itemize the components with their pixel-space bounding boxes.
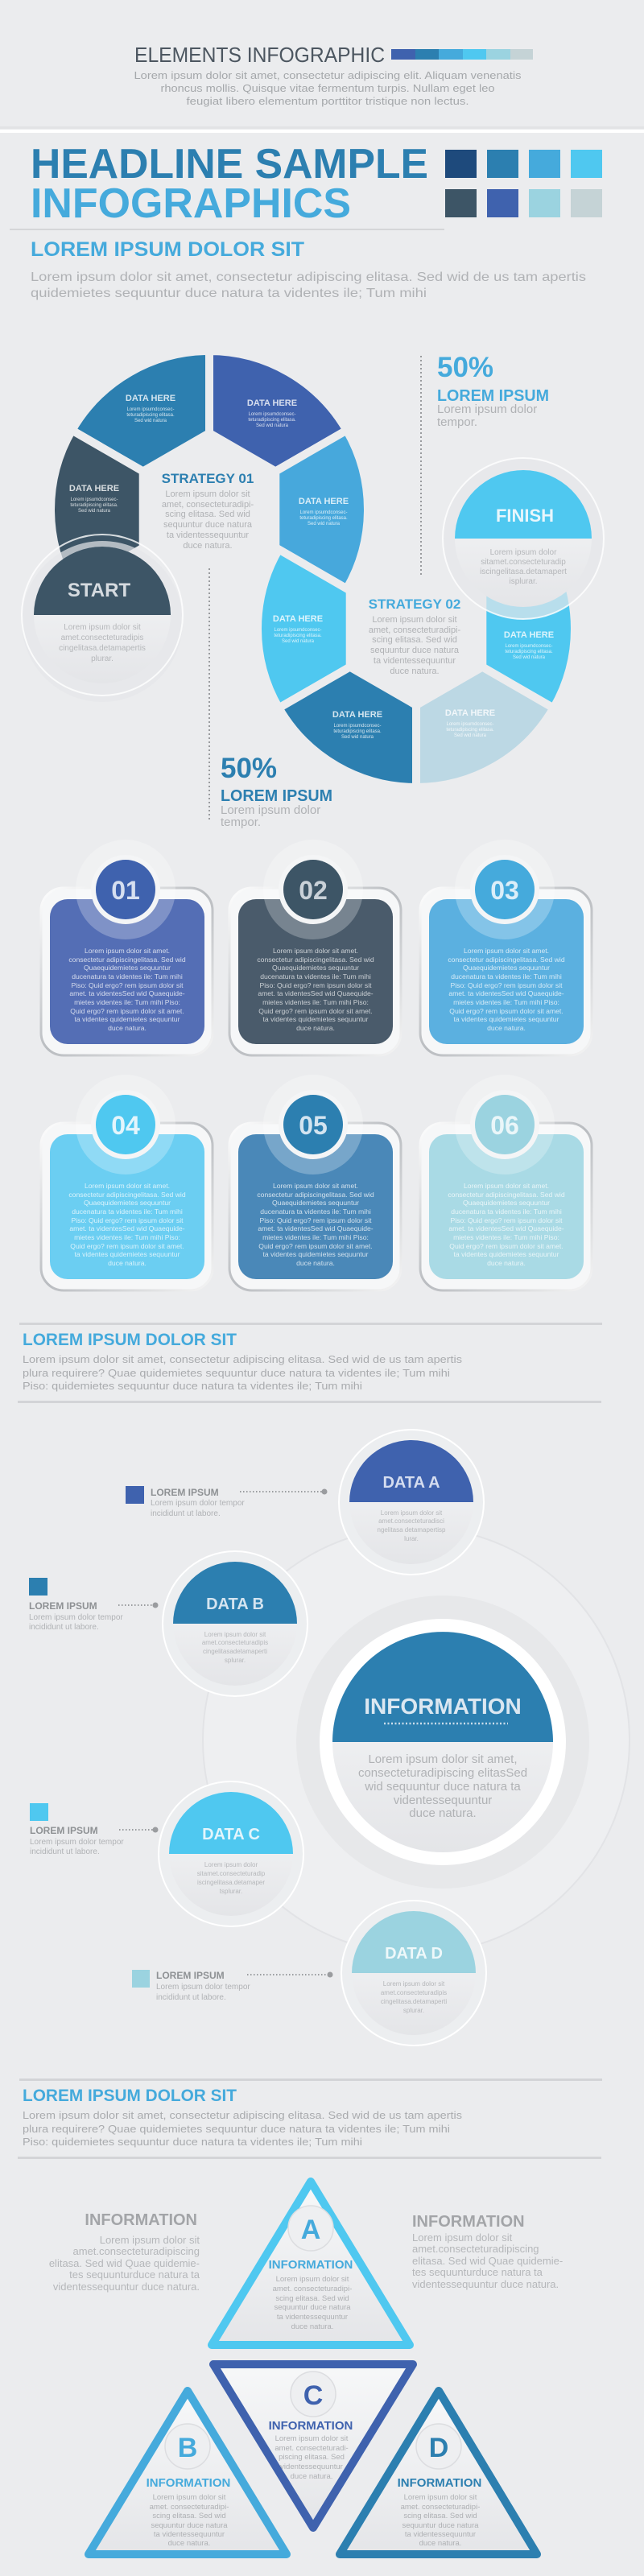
card 05: amet. ta videntesSed wid Quaequide- [258,1224,374,1232]
data labels: Lorem ipsumdconsec- [248,412,296,417]
card 05: mietes videntes ile: Tum mihi Piso: [262,1233,369,1241]
strategy 02 text [369,597,460,676]
left information text: tes sequunturduce natura ta [69,2268,200,2281]
headline: HEADLINE SAMPLE [31,141,428,188]
triangle C: INFORMATION [269,2419,353,2433]
data labels: DATA HERE [69,484,119,493]
strategy 01 text: amet, consecteturadipi- [162,500,254,510]
section 2 heading and text: Piso: quidemietes sequuntur duce natura ta videntes ile; Tum mihi [23,1380,362,1392]
card 05: Quaequidemietes sequuntur [272,1199,359,1207]
card 04: Quaequidemietes sequuntur [84,1199,171,1207]
information main circle: duce natura. [409,1806,477,1820]
triangle C: videntessequuntur [280,2462,343,2471]
card 05 [229,1075,401,1290]
right information text: videntessequuntur duce natura. [412,2278,559,2290]
card 01: Quaequidemietes sequuntur [84,964,171,972]
50% top callout: 50% [437,352,493,383]
triangle C: duce natura. [291,2472,332,2481]
header: elements infographic: feugiat libero elementum porttitor tristique non lectus. [187,95,469,107]
card 05: Piso: Quid ergo? rem ipsum dolor sit [259,1216,372,1224]
card 06: mietes videntes ile: Tum mihi Piso: [453,1233,559,1241]
data labels: DATA HERE [332,710,382,720]
data B circle: amet.consecteturadipis [202,1639,268,1646]
50% bottom callout: tempor. [221,815,261,829]
start circle: cingelitasa.detamapertis [59,644,146,653]
data labels: Lorem ipsumdconsec- [446,722,494,727]
triangle A: ta videntessequuntur [277,2313,348,2322]
data C circle: iscingelitasa.detamaper [197,1879,265,1886]
information main circle [332,1632,553,1852]
strategy 02 text: ta videntessequuntur [374,656,456,666]
strategy 02 ring [258,549,575,787]
card 06: amet. ta videntesSed wid Quaequide- [448,1224,564,1232]
information main circle: consecteturadipiscing elitasSed [358,1766,527,1780]
triangle A: Lorem ipsum dolor sit [276,2275,349,2284]
card 06: Quaequidemietes sequuntur [463,1199,550,1207]
card 01: Piso: Quid ergo? rem ipsum dolor sit [71,981,184,989]
triangle C: Lorem ipsum dolor sit [275,2434,349,2443]
data A circle: amet.consecteturadisci [378,1517,444,1525]
triangles diagram [49,2182,563,2554]
card 05: Lorem ipsum dolor sit amet. [273,1182,358,1190]
data labels: teturadipiscing elitasa. [505,650,553,654]
triangle A [212,2182,410,2345]
finish circle: sitamet.consecteturadip [481,558,566,567]
strategy 01 text: duce natura. [183,541,233,551]
triangle D: scing elitasa. Sed wid [403,2512,477,2520]
strategy 02 text: duce natura. [390,667,440,676]
card 04: 04 [111,1111,140,1140]
triangle B: sequuntur duce natura [151,2521,228,2530]
label D: Lorem ipsum dolor tempor [156,1983,250,1992]
card 01: duce natura. [108,1024,147,1032]
card 02: Piso: Quid ergo? rem ipsum dolor sit [259,981,372,989]
section 3 heading and text: LOREM IPSUM DOLOR SIT [23,2087,237,2105]
strategy 01 text: STRATEGY 01 [162,471,254,486]
card 01: consectetur adipiscingelitasa. Sed wid [68,956,186,964]
card 06 [420,1075,592,1290]
data A circle [339,1430,484,1575]
data labels: DATA HERE [247,398,297,408]
data labels: Lorem ipsumdconsec- [299,510,348,515]
data labels: Sed wid natura [78,509,111,514]
data labels: Sed wid natura [134,419,167,423]
card 02: amet. ta videntesSed wid Quaequide- [258,989,374,997]
card 01: mietes videntes ile: Tum mihi Piso: [74,998,180,1006]
50% top callout: Lorem ipsum dolor [437,402,537,416]
data labels: DATA HERE [299,497,349,506]
card 04: ta videntes quidemietes sequuntur [75,1250,180,1258]
headline: INFOGRAPHICS [31,180,351,227]
header: elements infographic [134,43,533,107]
label C: Lorem ipsum dolor tempor [30,1838,124,1847]
data labels: Sed wid natura [454,733,487,738]
information main circle: INFORMATION [364,1694,522,1719]
card 04: Lorem ipsum dolor sit amet. [85,1182,170,1190]
information main circle: videntessequuntur [394,1794,492,1807]
data labels: Sed wid natura [341,735,374,740]
data C circle: tsplurar. [220,1888,242,1895]
card 03: ta videntes quidemietes sequuntur [454,1015,559,1023]
card 02: ducenatura ta videntes ile: Tum mihi [260,972,371,980]
triangle D [340,2391,537,2554]
data A circle: lurar. [404,1535,419,1542]
data D circle: Lorem ipsum dolor sit [383,1980,445,1988]
header: elements infographic: rhoncus mollis. Quisque vitae fermentum turpis. Nullam eget leo [161,82,494,94]
triangle B: INFORMATION [147,2476,230,2490]
data D circle [341,1901,486,2046]
data D circle: amet.consecteturadipis [381,1989,447,1996]
section 3 heading and text: Lorem ipsum dolor sit amet, consectetur adipiscing elitasa. Sed wid de us tam apertis [23,2109,463,2121]
data labels: Lorem ipsumdconsec- [126,407,175,412]
finish circle: isplurar. [509,577,538,586]
finish circle: iscingelitasa.detamapert [480,568,567,576]
card 02 [229,840,401,1055]
data labels: Lorem ipsumdconsec- [505,644,553,649]
card 03: duce natura. [487,1024,526,1032]
strategy 02 text: amet, consecteturadipi- [369,625,460,635]
finish circle: FINISH [496,506,554,526]
data B circle: DATA B [206,1596,264,1613]
data B circle: splurar. [225,1657,246,1664]
strategy 01 text: Lorem ipsum dolor sit [165,489,250,499]
card 04: mietes videntes ile: Tum mihi Piso: [74,1233,180,1241]
data labels: DATA HERE [504,630,554,640]
strategy 01 text: sequuntur duce natura [163,520,253,530]
headline [31,141,428,227]
data labels: Lorem ipsumdconsec- [70,497,118,502]
right information text: amet.consecteturadipiscing [412,2243,539,2255]
section 3 heading and text [23,2087,463,2148]
data labels: teturadipiscing elitasa. [299,516,348,521]
data labels: DATA HERE [445,708,495,718]
data labels [69,394,554,740]
data C circle: Lorem ipsum dolor [204,1861,258,1868]
header: elements infographic: Lorem ipsum dolor sit amet, consectetur adipiscing elit. Aliquam venenatis [134,69,522,81]
card 01 [41,840,213,1055]
left information text: INFORMATION [85,2211,197,2229]
triangle B: Lorem ipsum dolor sit [153,2493,226,2502]
card 03: Quid ergo? rem ipsum dolor sit amet. [449,1007,564,1015]
data labels: DATA HERE [273,614,323,624]
label A [126,1486,327,1518]
data labels: Sed wid natura [256,423,289,428]
card 06: ta videntes quidemietes sequuntur [454,1250,559,1258]
label A: Lorem ipsum dolor tempor [151,1499,245,1508]
numbered cards grid [41,840,592,1290]
card 03: Lorem ipsum dolor sit amet. [464,947,549,955]
start circle: START [68,580,130,601]
label B [29,1578,158,1632]
data B circle: cingelitasadetamaperti [203,1648,267,1655]
card 02: 02 [299,876,328,905]
left information text: Lorem ipsum dolor sit [100,2234,200,2246]
50% bottom callout: LOREM IPSUM [221,787,332,805]
label C: incididunt ut labore. [30,1847,100,1856]
right information text [412,2213,563,2290]
data A circle: ngelitasa detamapertisp [378,1526,446,1534]
card 03: mietes videntes ile: Tum mihi Piso: [453,998,559,1006]
data C circle [159,1781,303,1926]
card 02: Quid ergo? rem ipsum dolor sit amet. [258,1007,373,1015]
information circle diagram [29,1430,630,2046]
start circle [22,535,183,702]
finish circle: Lorem ipsum dolor [490,548,557,557]
section 3 heading and text: Piso: quidemietes sequuntur duce natura ta videntes ile; Tum mihi [23,2136,362,2148]
card 06: ducenatura ta videntes ile: Tum mihi [451,1208,562,1216]
data A circle: DATA A [382,1474,440,1492]
data A circle: Lorem ipsum dolor sit [381,1509,443,1517]
triangle A: duce natura. [291,2322,333,2331]
triangle A: A [301,2215,320,2245]
data labels: teturadipiscing elitasa. [70,503,118,508]
strategy 02 text: sequuntur duce natura [370,646,460,655]
data labels: Lorem ipsumdconsec- [274,628,322,633]
section 1 heading and text: quidemietes sequuntur duce natura ta videntes ile; Tum mihi [31,287,427,300]
triangle C: amet. consecteturadi- [275,2444,349,2453]
left information text: amet.consecteturadipiscing [72,2245,200,2257]
label D [132,1970,333,2002]
right information text: INFORMATION [412,2213,525,2231]
card 05: 05 [299,1111,328,1140]
card 06: consectetur adipiscingelitasa. Sed wid [448,1191,565,1199]
triangle C [213,2364,413,2528]
card 06: Quid ergo? rem ipsum dolor sit amet. [449,1242,564,1250]
data labels: Sed wid natura [513,655,546,660]
triangle A: INFORMATION [269,2258,353,2272]
card 04 [41,1075,213,1290]
data C circle: sitamet.consecteturadip [197,1870,266,1877]
card 04: ducenatura ta videntes ile: Tum mihi [72,1208,183,1216]
50% bottom callout: 50% [221,753,277,784]
triangle D: Lorem ipsum dolor sit [404,2493,477,2502]
card 05: duce natura. [296,1259,335,1267]
left information text [49,2211,200,2293]
data B circle [163,1551,308,1696]
50% bottom callout [221,753,332,829]
strategy diagram [22,351,604,829]
label C: LOREM IPSUM [30,1825,98,1836]
card 02: ta videntes quidemietes sequuntur [263,1015,369,1023]
strategy 02 text: STRATEGY 02 [369,597,460,612]
color bar [391,49,533,60]
right information text: Lorem ipsum dolor sit [412,2231,513,2244]
triangle D: D [429,2433,448,2463]
left information text: videntessequuntur duce natura. [53,2281,200,2293]
data labels: teturadipiscing elitasa. [126,413,175,418]
data C circle: DATA C [202,1826,260,1843]
information main circle: Lorem ipsum dolor sit amet, [368,1752,518,1766]
triangle D: amet. consecteturadipi- [401,2503,480,2512]
card 06: Lorem ipsum dolor sit amet. [464,1182,549,1190]
information main circle: wid sequuntur duce natura ta [364,1780,521,1794]
label B: LOREM IPSUM [29,1600,97,1612]
50% top callout: tempor. [437,415,477,429]
card 03: amet. ta videntesSed wid Quaequide- [448,989,564,997]
data D circle: splurar. [403,2007,424,2014]
finish circle [443,458,604,619]
card 01: amet. ta videntesSed wid Quaequide- [69,989,185,997]
card 02: consectetur adipiscingelitasa. Sed wid [257,956,374,964]
card 01: ducenatura ta videntes ile: Tum mihi [72,972,183,980]
triangle D: duce natura. [419,2539,461,2548]
start circle: amet.consecteturadipis [61,634,143,642]
background circle [203,1527,630,1954]
strategy 01 text: ta videntessequuntur [167,530,249,540]
triangle B: duce natura. [168,2539,210,2548]
data D circle: DATA D [385,1945,443,1963]
card 01: 01 [111,876,140,905]
triangle A: sequuntur duce natura [274,2303,351,2312]
triangle D: ta videntessequuntur [405,2530,476,2539]
label A: incididunt ut labore. [151,1509,221,1518]
data B circle: Lorem ipsum dolor sit [204,1631,266,1638]
card 03: 03 [490,876,519,905]
section 1 heading and text: Lorem ipsum dolor sit amet, consectetur adipiscing elitasa. Sed wid de us tam apertis [31,270,586,284]
card 01: Quid ergo? rem ipsum dolor sit amet. [70,1007,184,1015]
triangle B: scing elitasa. Sed wid [152,2512,226,2520]
label C [30,1803,158,1856]
triangle B: B [178,2433,197,2463]
strategy 01 text [162,471,254,551]
data labels: teturadipiscing elitasa. [274,634,322,638]
color swatches [445,150,602,217]
triangle B: ta videntessequuntur [154,2530,225,2539]
card 03 [420,840,592,1055]
card 02: mietes videntes ile: Tum mihi Piso: [262,998,369,1006]
section 2 heading and text: plura requirere? Quae quidemietes sequuntur duce natura ta videntes ile; Tum mihi [23,1367,450,1379]
card 04: consectetur adipiscingelitasa. Sed wid [68,1191,186,1199]
start circle: Lorem ipsum dolor sit [64,623,141,632]
card 03: consectetur adipiscingelitasa. Sed wid [448,956,565,964]
section 2 heading and text: LOREM IPSUM DOLOR SIT [23,1331,237,1349]
card 05: Quid ergo? rem ipsum dolor sit amet. [258,1242,373,1250]
card 03: Quaequidemietes sequuntur [463,964,550,972]
section 1 heading and text [31,238,586,300]
50% top callout [437,352,549,429]
section 3 heading and text: plura requirere? Quae quidemietes sequuntur duce natura ta videntes ile; Tum mihi [23,2123,450,2135]
data labels: teturadipiscing elitasa. [333,729,382,734]
label A: LOREM IPSUM [151,1487,219,1498]
card 02: Lorem ipsum dolor sit amet. [273,947,358,955]
header: elements infographic: ELEMENTS INFOGRAPHIC [134,43,385,67]
card 04: Piso: Quid ergo? rem ipsum dolor sit [71,1216,184,1224]
left information text: elitasa. Sed wid Quae quidemie- [49,2257,200,2269]
section 2 heading and text: Lorem ipsum dolor sit amet, consectetur adipiscing elitasa. Sed wid de us tam apertis [23,1353,463,1365]
label B: Lorem ipsum dolor tempor [29,1613,123,1622]
start circle: plurar. [91,654,114,663]
card 03: ducenatura ta videntes ile: Tum mihi [451,972,562,980]
card 01: Lorem ipsum dolor sit amet. [85,947,170,955]
card 02: Quaequidemietes sequuntur [272,964,359,972]
50% top callout: LOREM IPSUM [437,387,549,405]
label B: incididunt ut labore. [29,1623,99,1632]
dotted lines [209,356,421,821]
right information text: elitasa. Sed wid Quae quidemie- [412,2255,563,2267]
triangle D: INFORMATION [398,2476,481,2490]
card 01: ta videntes quidemietes sequuntur [75,1015,180,1023]
triangle D: sequuntur duce natura [402,2521,479,2530]
strategy 02 text: Lorem ipsum dolor sit [372,615,457,625]
triangle A: scing elitasa. Sed wid [275,2294,349,2303]
triangle B: amet. consecteturadipi- [150,2503,229,2512]
triangle B [89,2391,287,2554]
data labels: DATA HERE [126,394,175,403]
strategy 02 text: scing elitasa. Sed wid [372,635,457,645]
strategy 01 text: scing elitasa. Sed wid [165,510,250,519]
card 04: duce natura. [108,1259,147,1267]
card 05: ducenatura ta videntes ile: Tum mihi [260,1208,371,1216]
card 02: duce natura. [296,1024,335,1032]
data D circle: cingelitasa.detamaperti [381,1998,447,2005]
triangle A: amet. consecteturadipi- [273,2285,352,2293]
label D: LOREM IPSUM [156,1970,225,1981]
section 2 heading and text [23,1331,463,1392]
data labels: Sed wid natura [308,522,341,526]
data labels: Sed wid natura [282,639,315,644]
card 04: amet. ta videntesSed wid Quaequide- [69,1224,185,1232]
card 05: consectetur adipiscingelitasa. Sed wid [257,1191,374,1199]
card 05: ta videntes quidemietes sequuntur [263,1250,369,1258]
card 06: duce natura. [487,1259,526,1267]
right information text: tes sequunturduce natura ta [412,2266,543,2278]
triangle C: C [303,2380,323,2411]
card 03: Piso: Quid ergo? rem ipsum dolor sit [451,981,563,989]
strategy 01 ring [51,351,368,589]
data labels: teturadipiscing elitasa. [446,728,494,733]
card 06: Piso: Quid ergo? rem ipsum dolor sit [451,1216,563,1224]
card 04: Quid ergo? rem ipsum dolor sit amet. [70,1242,184,1250]
label D: incididunt ut labore. [156,1993,226,2002]
50% bottom callout: Lorem ipsum dolor [221,803,320,817]
triangle C: piscing elitasa. Sed [279,2453,345,2462]
data labels: Lorem ipsumdconsec- [333,724,382,729]
section 1 heading and text: LOREM IPSUM DOLOR SIT [31,238,304,261]
card 06: 06 [490,1111,519,1140]
data labels: teturadipiscing elitasa. [248,418,296,423]
